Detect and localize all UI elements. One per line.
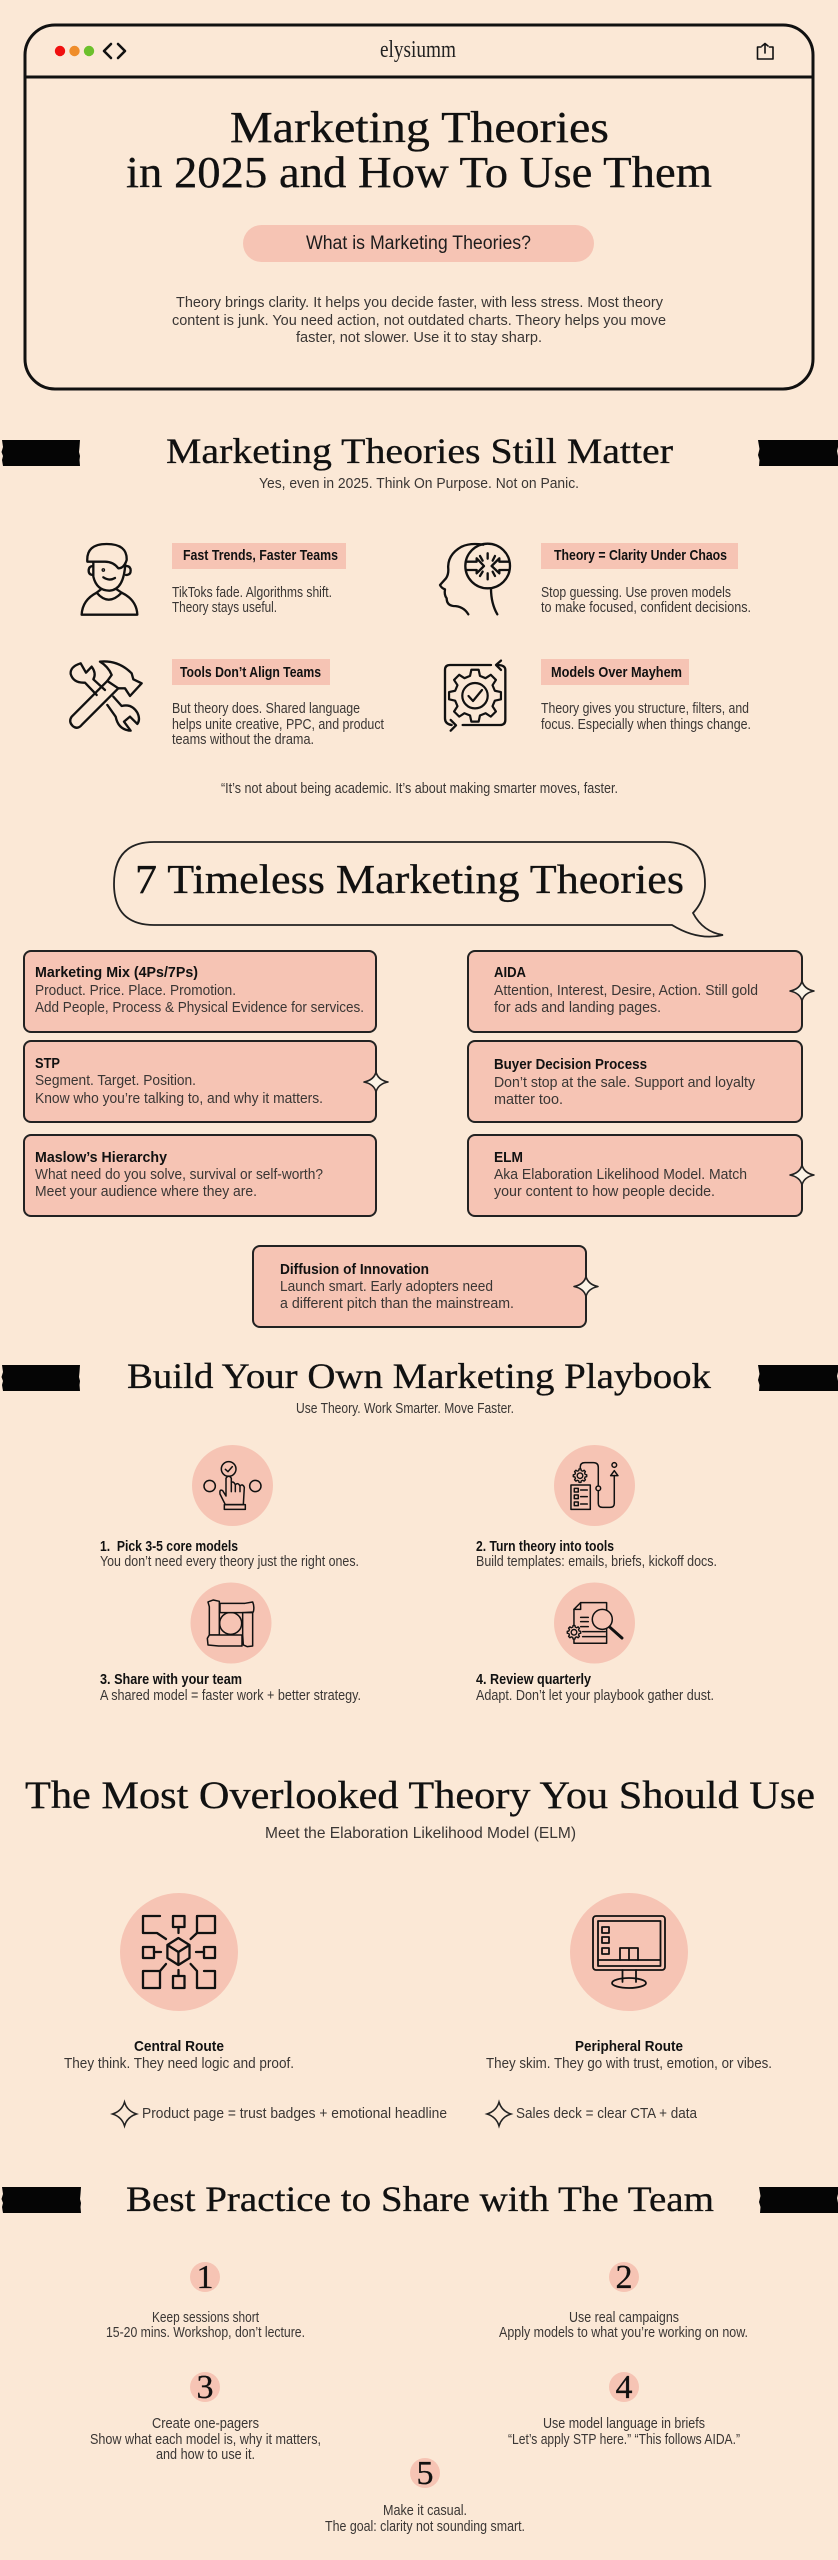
tape right <box>758 1365 838 1391</box>
practice 2 <box>499 2259 748 2341</box>
card: aida: for ads and landing pages. <box>494 1000 661 1016</box>
panel: marketing theories still matter <box>2 431 838 797</box>
text: peripheral route: They skim. They go with trust, emotion, or vibes. <box>486 2056 772 2072</box>
intro paragraph: faster, not slower. Use it to stay sharp. <box>296 329 542 346</box>
tag: theory clarity <box>541 543 738 569</box>
tag: tools <box>172 659 330 685</box>
text: fast trends: TikToks fade. Algorithms shift. <box>172 585 332 601</box>
heading: Build Your Own Marketing Playbook <box>127 1356 711 1396</box>
intro paragraph: Theory brings clarity. It helps you decide faster, with less stress. Most theory <box>176 294 663 311</box>
icon: share <box>758 44 773 59</box>
card: aida <box>468 951 814 1032</box>
panel: most overlooked theory <box>25 1774 815 2126</box>
callout: what is marketing theories pill: What is Marketing Theories? <box>306 233 531 254</box>
text: step 2: 2. Turn theory into tools <box>476 1538 614 1555</box>
icon: turn theory into tools <box>554 1445 635 1526</box>
card: aida: Attention, Interest, Desire, Action. Still gold <box>494 983 758 999</box>
subheading: Meet the Elaboration Likelihood Model (ELM) <box>265 1825 576 1842</box>
subheading: Yes, even in 2025. Think On Purpose. Not on Panic. <box>259 475 579 492</box>
card: buyer decision process: Don’t stop at the sale. Support and loyalty <box>494 1075 756 1091</box>
practice 4: “Let’s apply STP here.” “This follows AIDA.” <box>508 2432 740 2448</box>
card: marketing mix: Add People, Process & Physical Evidence for services. <box>35 1000 364 1016</box>
panel: browser window header <box>25 25 813 389</box>
practice 3: Show what each model is, why it matters, <box>90 2432 321 2448</box>
intro paragraph: content is junk. You need action, not outdated charts. Theory helps you move <box>172 312 666 329</box>
icon: code chevrons <box>104 44 125 58</box>
text: step 4: 4. Review quarterly <box>476 1671 592 1688</box>
subheading: Use Theory. Work Smarter. Move Faster. <box>296 1401 514 1417</box>
card: maslow: What need do you solve, survival or self-worth? <box>35 1167 323 1183</box>
text: peripheral route <box>486 2038 772 2072</box>
title <box>126 103 712 197</box>
callout: what is marketing theories pill <box>243 225 594 262</box>
icon: gear with check <box>445 661 505 731</box>
card: elm: your content to how people decide. <box>494 1184 715 1200</box>
text: step 3 <box>100 1671 361 1704</box>
text: step 1: 1. Pick 3-5 core models <box>100 1538 238 1555</box>
icon: crossed tools <box>70 661 142 731</box>
speech bubble heading: 7 Timeless Marketing Theories <box>135 856 684 902</box>
text: step 2: Build templates: emails, briefs, kickoff docs. <box>476 1554 717 1570</box>
text: step 4: Adapt. Don’t let your playbook gather dust. <box>476 1688 714 1704</box>
tag: models: Models Over Mayhem <box>551 664 682 681</box>
example: sales deck: Sales deck = clear CTA + data <box>516 2106 698 2122</box>
card: elm: ELM <box>494 1149 523 1166</box>
tag: tools: Tools Don’t Align Teams <box>180 664 321 681</box>
tape right <box>759 2187 838 2213</box>
practice 1: Keep sessions short <box>152 2310 259 2326</box>
quote: “It’s not about being academic. It’s about making smarter moves, faster. <box>221 781 618 797</box>
text: fast trends: Theory stays useful. <box>172 600 277 616</box>
heading: Best Practice to Share with The Team <box>126 2179 714 2219</box>
example: product page <box>112 2102 447 2126</box>
practice 4: Use model language in briefs <box>543 2416 705 2432</box>
card: stp: Know who you’re talking to, and why it matters. <box>35 1091 323 1107</box>
practice 3: and how to use it. <box>156 2447 255 2463</box>
text: central route: Central Route <box>134 2038 224 2055</box>
card: diffusion of innovation: Launch smart. Early adopters need <box>280 1279 493 1295</box>
practice 2: 2 <box>616 2259 632 2296</box>
card: stp: STP <box>35 1055 60 1072</box>
text: tools: teams without the drama. <box>172 732 314 748</box>
heading: The Most Overlooked Theory You Should Use <box>25 1774 815 1817</box>
tag: theory clarity: Theory = Clarity Under Chaos <box>554 547 727 564</box>
tape right <box>758 440 838 466</box>
tape left <box>2 1365 80 1391</box>
practice 3 <box>90 2369 321 2463</box>
practice 3: 3 <box>196 2369 214 2406</box>
title: Marketing Theories <box>230 103 609 152</box>
card: elm <box>468 1135 814 1216</box>
card: maslow: Maslow’s Hierarchy <box>35 1149 168 1166</box>
icon: person <box>82 544 137 615</box>
card: buyer decision process <box>468 1041 802 1122</box>
intro paragraph <box>172 294 666 346</box>
card: marketing mix <box>24 951 376 1032</box>
card: buyer decision process: Buyer Decision Process <box>494 1056 647 1073</box>
card: marketing mix: Product. Price. Place. Promotion. <box>35 983 236 999</box>
practice 5: 5 <box>416 2455 434 2492</box>
icon: share with team <box>190 1582 272 1664</box>
practice 5: Make it casual. <box>383 2503 467 2519</box>
card: aida: AIDA <box>494 964 526 981</box>
tag: fast trends <box>172 543 346 569</box>
text: tools: helps unite creative, PPC, and product <box>172 717 384 733</box>
text: theory clarity: Stop guessing. Use proven models <box>541 585 731 601</box>
practice 1 <box>106 2259 305 2341</box>
card: stp <box>24 1041 388 1122</box>
practice 5: The goal: clarity not sounding smart. <box>325 2519 525 2535</box>
example: product page: Product page = trust badges + emotional headline <box>142 2106 447 2122</box>
text: models: focus. Especially when things change. <box>541 717 751 733</box>
panel: best practice to share with the team <box>2 2179 838 2535</box>
text: step 3: A shared model = faster work + better strategy. <box>100 1688 361 1704</box>
text: fast trends <box>172 585 332 616</box>
card: buyer decision process: matter too. <box>494 1092 563 1108</box>
heading: Marketing Theories Still Matter <box>166 431 673 471</box>
card: maslow <box>24 1135 376 1216</box>
icon: review quarterly <box>554 1582 635 1664</box>
card: elm: Aka Elaboration Likelihood Model. Match <box>494 1167 747 1183</box>
text: central route <box>64 2038 294 2072</box>
icon: central route network <box>120 1893 238 2011</box>
tape left <box>2 440 80 466</box>
text: tools <box>172 701 384 748</box>
card: diffusion of innovation: a different pitch than the mainstream. <box>280 1296 514 1312</box>
icon: head with arrows <box>440 544 510 614</box>
tag: fast trends: Fast Trends, Faster Teams <box>183 547 338 564</box>
text: models <box>541 701 751 733</box>
speech bubble heading <box>114 842 723 937</box>
text: step 4 <box>476 1671 714 1704</box>
card: maslow: Meet your audience where they are. <box>35 1184 257 1200</box>
text: theory clarity: to make focused, confident decisions. <box>541 600 751 616</box>
practice 5 <box>325 2455 525 2535</box>
panel: 7 timeless marketing theories <box>24 842 814 1327</box>
brand logo: elysiumm <box>380 37 456 63</box>
practice 4 <box>508 2369 740 2448</box>
card: marketing mix: Marketing Mix (4Ps/7Ps) <box>35 964 198 981</box>
text: tools: But theory does. Shared language <box>172 701 360 717</box>
practice 2: Use real campaigns <box>569 2310 679 2326</box>
practice 1: 15-20 mins. Workshop, don’t lecture. <box>106 2325 305 2341</box>
text: models: Theory gives you structure, filters, and <box>541 701 749 717</box>
panel: build your own marketing playbook <box>2 1356 838 1704</box>
text: central route: They think. They need logic and proof. <box>64 2056 294 2072</box>
practice 2: Apply models to what you’re working on now. <box>499 2325 748 2341</box>
text: step 3: 3. Share with your team <box>100 1671 242 1688</box>
text: step 1 <box>100 1538 359 1570</box>
card: stp: Segment. Target. Position. <box>35 1073 196 1089</box>
title: in 2025 and How To Use Them <box>126 148 712 197</box>
icon: peripheral route monitor <box>570 1893 688 2011</box>
text: step 2 <box>476 1538 717 1570</box>
example: sales deck <box>487 2102 698 2126</box>
card: diffusion of innovation: Diffusion of Innovation <box>280 1261 429 1278</box>
text: step 1: You don’t need every theory just the right ones. <box>100 1554 359 1570</box>
tape left <box>2 2187 81 2213</box>
text: theory clarity <box>541 585 751 616</box>
card: diffusion of innovation <box>253 1246 598 1327</box>
practice 4: 4 <box>616 2369 632 2406</box>
tag: models <box>541 659 689 685</box>
practice 1: 1 <box>196 2259 214 2296</box>
text: peripheral route: Peripheral Route <box>575 2038 683 2055</box>
icon: window dots <box>55 46 94 56</box>
practice 3: Create one-pagers <box>152 2416 259 2432</box>
icon: pick models <box>192 1445 273 1526</box>
